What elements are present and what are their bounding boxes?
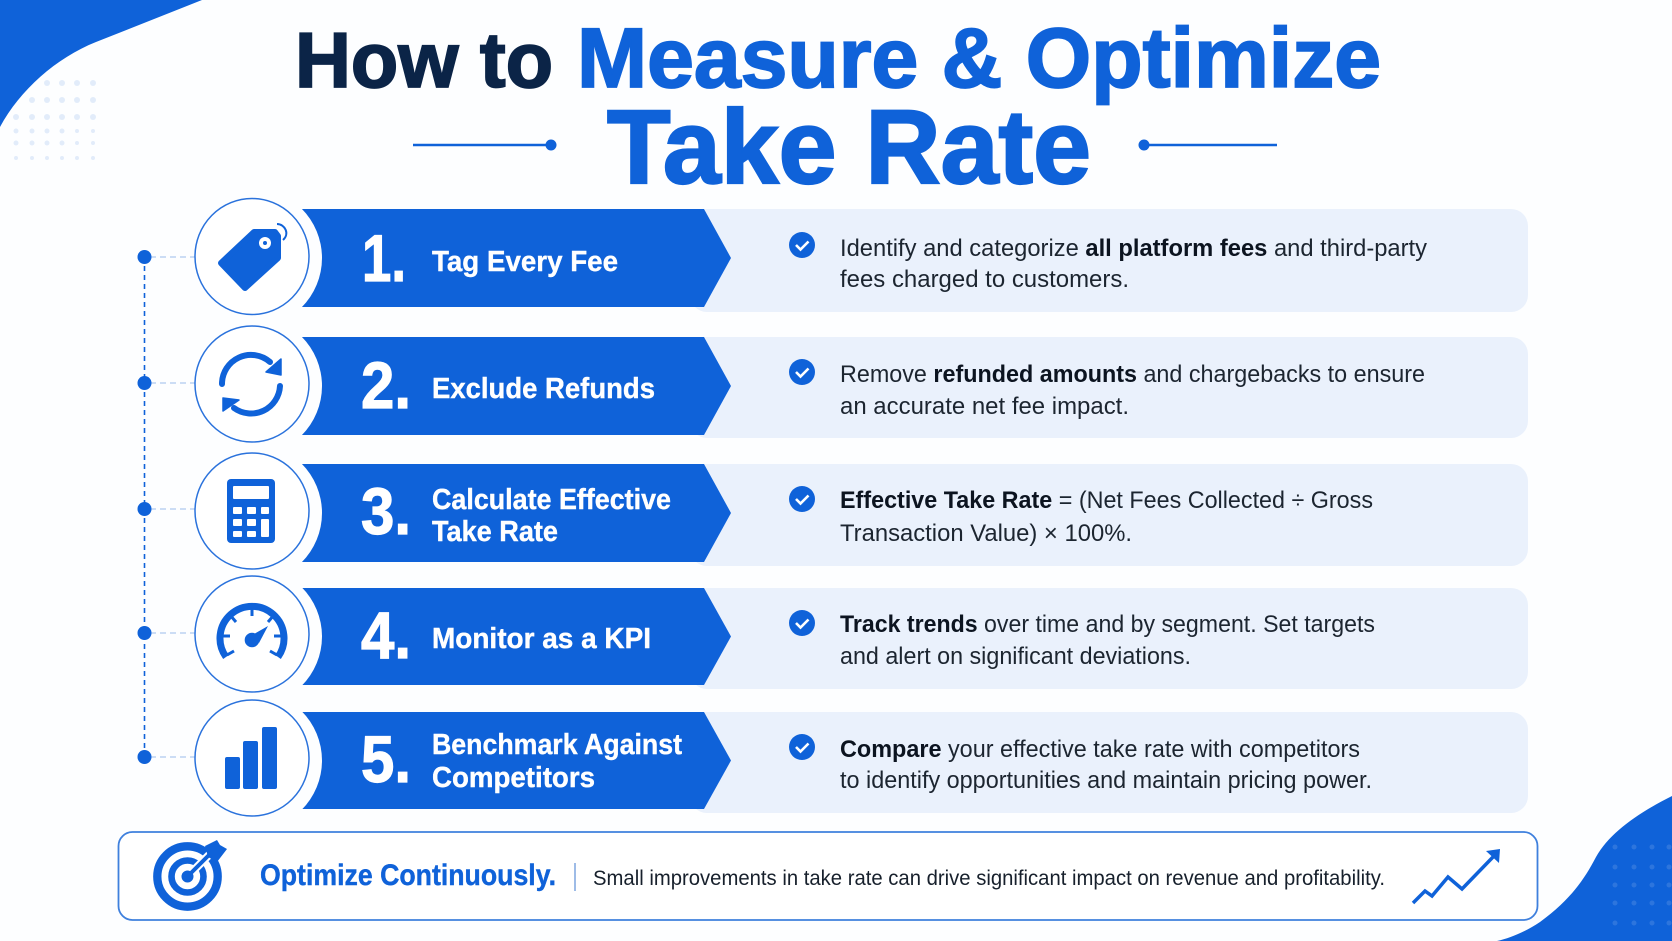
step label: Monitor as a KPI (432, 623, 651, 655)
step number: 5. (361, 722, 411, 796)
title (295, 11, 1381, 206)
text block: and alert on significant deviations. (840, 643, 1191, 670)
step 4 arrow banner (182, 566, 731, 706)
step label: Competitors (432, 762, 595, 794)
text block (840, 736, 1372, 794)
icon: price tag (195, 198, 309, 314)
icon: check badge (789, 610, 815, 636)
text block (840, 361, 1425, 420)
step 3 arrow banner (182, 443, 731, 583)
step label: Take Rate (432, 516, 558, 548)
title: Measure & Optimize (577, 11, 1381, 105)
step 1 arrow banner (182, 188, 731, 328)
title accent line: left (413, 140, 556, 150)
icon: check badge (789, 486, 815, 512)
icon: bar chart (195, 700, 309, 816)
icon: check badge (789, 359, 815, 385)
text block: Identify and categorize all platform fees and third-party (840, 235, 1427, 262)
step number: 4. (361, 598, 411, 672)
text block: Remove refunded amounts and chargebacks to ensure (840, 361, 1425, 388)
step label: Tag Every Fee (432, 246, 618, 278)
text block: Track trends over time and by segment. Set targets (840, 611, 1375, 638)
panel: step 4 description (690, 588, 1528, 689)
step label (432, 484, 671, 548)
text block: Transaction Value) × 100%. (840, 520, 1132, 547)
panel: step 5 description (690, 712, 1528, 813)
icon: target with arrow (157, 840, 227, 907)
panel: step 1 description (690, 209, 1528, 312)
title accent line: right (1138, 140, 1277, 150)
timeline connector (138, 250, 195, 764)
callout heading: Optimize Continuously. (260, 859, 556, 892)
icon: refresh arrows (195, 326, 309, 442)
text block: an accurate net fee impact. (840, 393, 1129, 420)
step label: Calculate Effective (432, 484, 671, 516)
text block: fees charged to customers. (840, 266, 1129, 293)
callout text: Small improvements in take rate can drive significant impact on revenue and profitability. (593, 867, 1385, 890)
icon: calculator (195, 453, 309, 569)
step number: 2. (361, 348, 411, 422)
panel: step 2 description (690, 337, 1528, 438)
decorative corner blob: bottom right (1497, 796, 1672, 941)
step label: Exclude Refunds (432, 373, 655, 405)
text block (840, 487, 1373, 547)
step label: Benchmark Against (432, 729, 682, 761)
text block: to identify opportunities and maintain pricing power. (840, 767, 1372, 794)
callout: optimize continuously (118, 832, 1538, 920)
step 5 arrow banner (182, 690, 731, 830)
step number: 3. (361, 474, 411, 548)
step 2 arrow banner (182, 316, 731, 456)
icon: check badge (789, 232, 815, 258)
title: Take Rate (607, 89, 1091, 206)
panel: step 3 description (690, 464, 1528, 566)
step label (432, 729, 682, 794)
icon: check badge (789, 734, 815, 760)
text block (840, 235, 1427, 293)
icon: trend arrow (1413, 849, 1500, 903)
decorative corner blob: top left (0, 0, 202, 160)
step number: 1. (362, 221, 406, 295)
text block (840, 611, 1375, 670)
text block: Effective Take Rate = (Net Fees Collected ÷ Gross (840, 487, 1373, 514)
icon: gauge (195, 576, 309, 692)
text block: Compare your effective take rate with competitors (840, 736, 1360, 763)
title: How to (295, 16, 553, 104)
